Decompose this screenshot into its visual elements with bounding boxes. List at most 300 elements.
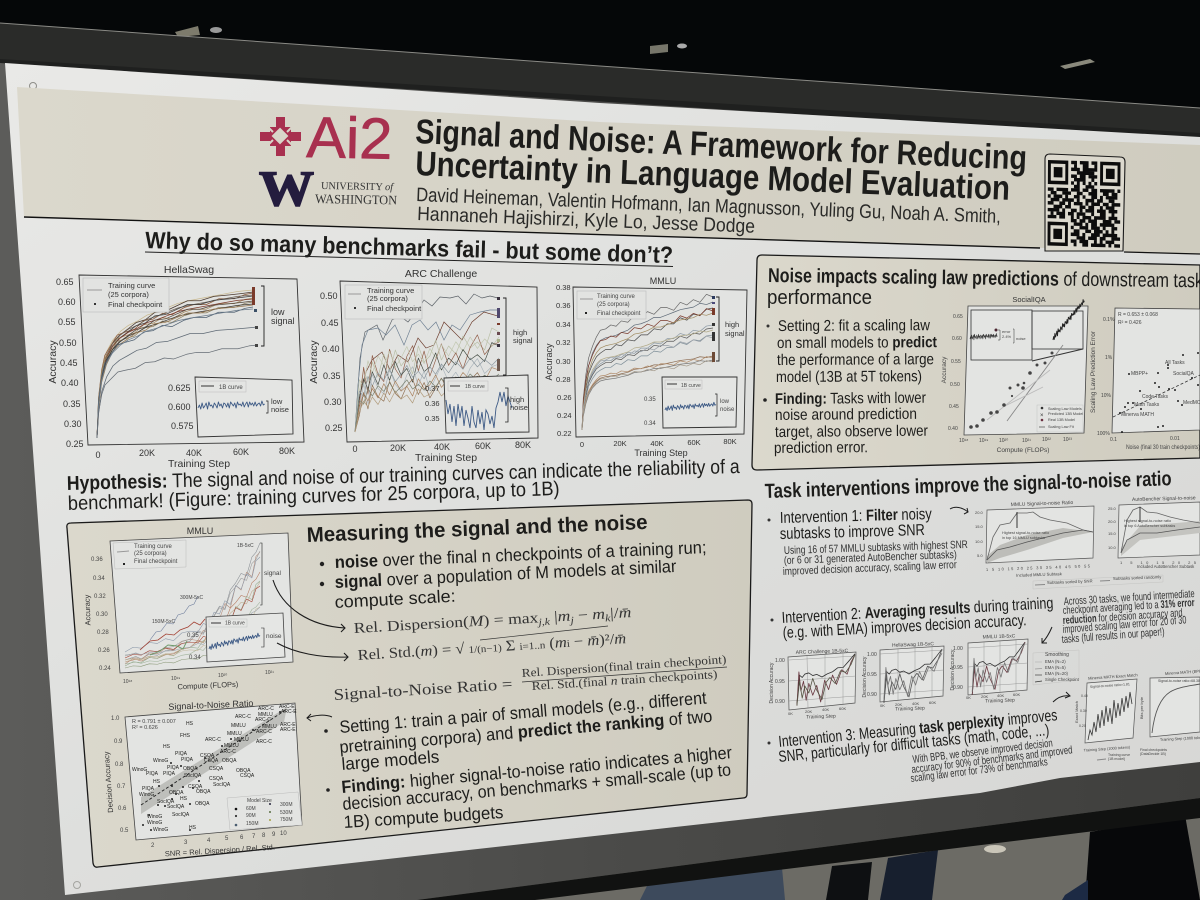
point labels: HS <box>189 825 197 831</box>
y axis labels: 0.24 <box>99 666 111 672</box>
legend: model size: Model Size <box>247 798 272 804</box>
legend: × <box>1040 413 1044 419</box>
chart: MMLU compute scaling: 300M-5xC <box>180 595 203 601</box>
x axis labels <box>580 437 737 449</box>
legend: smoothing <box>1033 650 1080 685</box>
bullet list: noise and signal definitions: noise over the final n checkpoints of a training run; <box>334 537 707 572</box>
point labels: PIQA <box>181 757 194 763</box>
x axis labels: 10¹⁸ <box>959 438 968 444</box>
inset: 1B curve: noise <box>510 403 528 412</box>
formula: relative dispersion: k <box>605 613 611 625</box>
x axis labels: 6 <box>240 835 244 841</box>
icon: Ai2 cross mark <box>260 117 301 156</box>
intervention 3 text: scaling law error for 73% of benchmarks <box>910 756 1049 785</box>
y axis labels: 10.0 <box>975 539 984 544</box>
y axis labels: 1.00 <box>775 658 785 664</box>
y axis labels: 0.40 <box>948 426 958 432</box>
chart: signal-to-noise vs decision accuracy <box>102 698 302 858</box>
y axis labels: 20.0 <box>1108 519 1117 524</box>
chart: noise vs scaling law prediction error: 0.01 <box>1170 436 1180 442</box>
y axis labels: 0.26 <box>557 393 572 402</box>
Ai2 wordmark: Ai2 <box>306 105 393 172</box>
chart: ARC Challenge training curves <box>308 268 538 464</box>
chart: noise vs scaling law prediction error: R² = 0.426 <box>1118 320 1142 326</box>
y axis labels: 0.5 <box>120 828 129 834</box>
hypothesis text <box>67 456 741 515</box>
x axis title: Training Step <box>415 452 477 464</box>
chart title: HellaSwag 1B-5xC <box>892 641 934 649</box>
point labels: SocIQA <box>213 782 231 788</box>
x axis labels: 10²² <box>1042 437 1051 443</box>
point labels: SocIQA <box>157 799 175 805</box>
curve bundle <box>355 294 499 432</box>
bullet list: setting 1 and finding: large models <box>341 746 440 774</box>
y axis labels: 0.9 <box>114 739 123 745</box>
y axis labels: 0.95 <box>867 672 877 678</box>
x axis labels: 10¹⁹ <box>979 438 988 444</box>
intervention 2 text: Intervention 2: Averaging results during training <box>781 595 1054 627</box>
line: sorted randomly <box>987 530 1093 560</box>
bullet list: noise and signal definitions <box>320 537 707 612</box>
legend: Training curve <box>108 281 155 290</box>
point labels: CSQA <box>204 758 219 764</box>
x axis labels: 60K <box>929 700 936 705</box>
y axis labels: 0.50 <box>950 382 960 388</box>
y axis labels: 0.45 <box>60 358 78 368</box>
chart: MMLU compute scaling: signal <box>264 570 282 577</box>
chart: Minerva MATH exact match: 0.30 <box>1080 709 1087 713</box>
point labels: MMLU <box>231 723 246 729</box>
x axis labels: 0 <box>95 450 101 460</box>
x axis labels <box>788 706 846 716</box>
inset: 1B curve: noise <box>266 633 282 640</box>
legend: Predicted 13B Model <box>1048 412 1083 416</box>
inset: 1B curve: 0.625 <box>168 383 191 393</box>
legend: Training curve <box>367 286 414 295</box>
task labels: Math Tasks <box>1134 402 1160 408</box>
legend: Final checkpoint <box>134 559 178 565</box>
inset: 1B curve: 0.35 <box>425 414 440 423</box>
formula: relative dispersion: |m <box>553 609 569 625</box>
y axis title: Decision Accuracy <box>102 751 115 813</box>
point labels: ARC-C <box>256 729 272 735</box>
point labels: ARC-C <box>205 737 221 743</box>
y axis labels: 0.50 <box>59 338 77 348</box>
signal bracket <box>261 286 264 346</box>
chart: MMLU signal-to-noise ratio by subtasks <box>975 500 1094 578</box>
regression line <box>1113 375 1200 417</box>
regression line <box>141 709 287 805</box>
y axis labels: 0.35 <box>323 371 341 381</box>
y axis labels: 5.0 <box>977 553 983 558</box>
legend: Final checkpoints <box>1140 748 1167 752</box>
chart: SocialIQA scaling law: 2.4% <box>1002 334 1012 339</box>
y axis labels: 1.00 <box>867 652 877 658</box>
chart: ARC Challenge decision accuracy <box>769 648 856 721</box>
y axis labels: 0.95 <box>775 679 785 685</box>
intervention 1 text: improved decision accuracy, scaling law error <box>783 559 957 578</box>
point labels: OBQA <box>169 790 184 796</box>
point labels: CSQA <box>200 753 215 759</box>
chart: ARC Challenge training curves: signal <box>513 336 533 345</box>
x axis labels: 5 <box>225 836 229 842</box>
scatter points <box>142 711 281 831</box>
y axis title: Exact Match <box>1074 701 1079 723</box>
x axis labels: 8 <box>262 833 266 839</box>
highlight arrow <box>1139 507 1141 522</box>
x axis title: Compute (FLOPs) <box>177 680 239 691</box>
bullet list: setting 2 and finding: the performance of a large <box>777 351 934 369</box>
x axis labels: 0.1 <box>1110 437 1117 443</box>
y axis labels: 0.6 <box>118 806 127 812</box>
University of Washington logo <box>259 160 398 216</box>
inset: 1B curve: noise <box>720 407 735 413</box>
confidence band <box>141 707 287 814</box>
y axis labels <box>556 283 572 438</box>
x axis labels: 0 <box>352 444 358 454</box>
point labels: R² = 0.626 <box>132 725 158 731</box>
y axis labels: 0.28 <box>97 630 109 636</box>
inset: 1B curve: 0.35 <box>644 397 656 403</box>
hypothesis text: benchmark! (Figure: training curves for 25 corpora, up to 1B) <box>67 478 560 515</box>
intervention 1 text: Using 16 of 57 MMLU subtasks with highest SNR <box>784 539 968 557</box>
task labels: Minerva MATH <box>1121 412 1154 418</box>
signal bracket <box>716 297 719 361</box>
legend: (25 corpora) <box>597 302 630 308</box>
y axis labels <box>953 646 963 691</box>
legend: (DataDecide 1B) <box>1140 752 1166 756</box>
point labels: MMLU <box>234 737 249 743</box>
inset: 1B curve: 0.34 <box>644 421 656 427</box>
bullet list: setting 2 and finding: Setting 2: fit a scaling law <box>778 317 931 335</box>
legend: Training curve <box>597 294 635 300</box>
zoomed inset frames <box>971 310 1083 361</box>
point labels: FHS <box>180 733 191 739</box>
arrow: intervention 1 to chart <box>950 507 968 514</box>
inset: 1B curve <box>425 375 529 433</box>
y axis labels: 0.40 <box>61 378 79 388</box>
y axis labels <box>320 291 343 433</box>
legend <box>345 285 422 319</box>
fit statistics: R = 0.653 ± 0.068 <box>1118 312 1158 318</box>
y axis labels: 0.32 <box>556 338 571 347</box>
x axis labels: 20K <box>895 702 902 707</box>
y axis labels: 1% <box>1105 355 1113 361</box>
panel heading: Measuring the signal and the noise <box>306 511 648 547</box>
x axis labels: 40K <box>822 707 829 712</box>
point labels: SocIQA <box>172 812 190 818</box>
point labels: ARC-C <box>258 706 274 712</box>
chart title: HellaSwag <box>164 264 214 276</box>
x axis labels: 40K <box>186 448 202 458</box>
inset: 1B curve <box>168 377 293 437</box>
point labels: CSQA <box>209 766 224 772</box>
x axis labels: 10 <box>280 831 287 837</box>
chart: MMLU compute scaling: 150M-5xC <box>152 619 175 625</box>
chart: MMLU compute scaling <box>82 526 293 691</box>
legend <box>83 278 169 312</box>
y axis labels: 0.55 <box>951 359 961 365</box>
smoothing curves <box>797 654 855 706</box>
y axis labels <box>948 314 963 432</box>
chart: SocialIQA scaling law: error <box>1002 329 1011 334</box>
bullet list: noise and signal definitions: compute scale: <box>334 586 456 612</box>
point labels: ARC-E <box>280 722 296 728</box>
inset: 1B curve: low <box>271 397 283 406</box>
arrow: noise to std <box>277 643 348 661</box>
y axis labels: 15.0 <box>975 524 984 529</box>
legend: (25 corpora) <box>367 294 408 303</box>
y axis labels: 0.30 <box>96 612 108 618</box>
bullet list: setting 1 and finding: Finding: higher signal-to-noise ratio indicates a higher <box>341 742 733 797</box>
y axis labels <box>1108 506 1117 550</box>
legend <box>577 291 646 319</box>
x axis labels: 0K <box>788 711 793 716</box>
point labels: ARC-C <box>256 739 272 745</box>
chart: AutoBencher signal-to-noise ratio: in top 6 AutoBencher subtasks <box>1124 524 1175 528</box>
chart title: MMLU <box>650 276 676 286</box>
point labels: PIQA <box>142 786 155 792</box>
chart: MMLU training curves: signal <box>725 329 745 338</box>
legend <box>1097 748 1167 761</box>
curve bundle <box>97 290 257 438</box>
formula: signal-to-noise ratio <box>333 652 727 704</box>
legend: model size: 150M <box>246 821 259 827</box>
legend: Training curve <box>134 544 172 550</box>
inset: 1B curve: low <box>720 399 730 405</box>
x axis labels <box>95 446 295 460</box>
y axis labels: 0.34 <box>556 320 571 329</box>
signal-to-noise note: Signal-to-noise ratio=1.81 <box>1090 682 1130 689</box>
y axis labels: 100% <box>1097 431 1110 437</box>
x axis labels: 1 5 10 15 20 25 30 35 40 45 50 55 <box>986 563 1091 572</box>
panel heading <box>767 265 1200 309</box>
y axis labels: 0.34 <box>93 576 105 582</box>
x axis labels: 2 <box>151 843 155 849</box>
smoothing curves <box>972 642 1025 695</box>
formula: relative std: Rel. Std.( m) = √ 1/(n−1) Σ i=1..n (mi − m̄)²/m̄ <box>357 631 627 664</box>
point labels: CSQA <box>209 776 224 782</box>
tape marks <box>30 82 80 888</box>
y axis labels: 0.36 <box>91 557 103 563</box>
task labels: Code Tasks <box>1142 394 1169 400</box>
x axis title: Training Step <box>168 458 230 470</box>
point labels: OBQA <box>195 801 210 807</box>
x axis labels: 40K <box>912 701 919 706</box>
bullet list: setting 1 and finding: Setting 1: train a pair of small models (e.g., different <box>339 688 707 737</box>
x axis labels: 80K <box>723 437 737 446</box>
task labels: All Tasks <box>1165 360 1185 366</box>
x axis labels: 60K <box>839 706 846 711</box>
y axis title: Accuracy <box>941 356 948 383</box>
point labels: WinoG <box>132 767 147 773</box>
highlight note: Highest signal-to-noise ratio <box>1124 519 1171 523</box>
y axis labels: 10% <box>1101 393 1112 399</box>
point labels: WinoG <box>139 792 154 798</box>
point labels: MMLU <box>258 712 273 718</box>
legend: subtask sort order: Subtasks sorted by SNR <box>1047 578 1093 585</box>
inset: 1B curve: 0.575 <box>171 421 194 431</box>
y axis labels: 10.0 <box>1108 545 1117 550</box>
hypothesis text: Hypothesis: The signal and noise of our training curves can indicate the reliability of a <box>67 456 741 495</box>
legend: model size <box>227 792 302 830</box>
intervention 1 text: Intervention 1: Filter noisy <box>780 506 932 527</box>
intervention 1 text <box>768 506 968 578</box>
chart title: Signal-to-Noise Ratio <box>168 698 254 712</box>
y axis title: Accuracy <box>308 340 320 384</box>
y axis title: Accuracy <box>82 594 93 626</box>
legend: smoothing: EMA (N=5) <box>1045 665 1066 670</box>
legend: model size: 750M <box>280 817 293 823</box>
y axis title: Decision Accuracy <box>950 649 956 690</box>
inset: 1B curve: high <box>510 395 524 404</box>
arrow: setting 1 to chart <box>307 714 332 721</box>
point labels: CSQA <box>188 784 203 790</box>
y axis labels: 0.40 <box>322 344 340 354</box>
low signal label: signal <box>271 316 295 326</box>
high signal label: high <box>725 320 739 329</box>
chart: SocialIQA scaling law: noise <box>1016 336 1026 341</box>
bullet list: noise and signal definitions: signal over a population of M models at similar <box>334 556 677 592</box>
title: Signal and Noise: A Framework for Reducing <box>415 113 1028 178</box>
x axis title: Training Step (1000 tokens) <box>1083 745 1131 753</box>
arrow: note to smoothing charts <box>1042 627 1052 643</box>
University of Washington logo: W <box>259 160 314 216</box>
line: sorted by SNR <box>1121 507 1200 553</box>
x axis labels: 10²¹ <box>1022 438 1031 444</box>
x axis labels: 10²³ <box>1063 437 1072 443</box>
point labels: SocIQA <box>167 804 185 810</box>
noisy curve <box>1088 692 1132 740</box>
x axis labels: 20K <box>139 448 155 458</box>
y axis labels: 0.65 <box>56 277 74 287</box>
legend: model size: 530M <box>280 810 293 816</box>
y axis labels: 0.30 <box>556 357 571 366</box>
x axis labels: 10²⁰ <box>218 673 227 679</box>
x axis labels <box>966 692 1020 700</box>
chart title: ARC Challenge <box>405 268 477 280</box>
point labels: ARC-C <box>235 714 251 720</box>
signal-to-noise note: Signal-to-noise ratio=68.38 <box>1158 679 1200 683</box>
scaling law fit lines <box>987 345 1063 421</box>
point labels: WinoG <box>153 827 168 833</box>
Ai2 logo <box>260 105 393 172</box>
legend: smoothing: EMA (N=20) <box>1045 671 1069 676</box>
x axis title: Compute (FLOPs) <box>997 447 1049 454</box>
y axis labels: 0.90 <box>867 692 877 698</box>
y axis title: Decision Accuracy <box>769 662 775 703</box>
bullet list: setting 2 and finding: target, also observe lower <box>775 423 928 441</box>
x axis labels: 60K <box>233 447 249 457</box>
formula: signal-to-noise ratio: Rel. Dispersion(final train checkpoint) <box>521 652 727 680</box>
y axis labels: 25.0 <box>1108 506 1117 511</box>
x axis labels: 10¹⁸ <box>123 679 132 685</box>
x axis labels: 4 <box>207 838 211 844</box>
y axis labels <box>867 652 877 698</box>
y axis labels: 0.45 <box>321 318 339 328</box>
bullet list: setting 1 and finding: 1B) compute budgets <box>343 802 504 832</box>
point labels: WinoG <box>147 820 162 826</box>
x axis labels: 60K <box>687 438 701 447</box>
legend <box>1037 405 1083 432</box>
header band <box>17 87 1200 254</box>
point labels: WinoG <box>153 758 168 764</box>
chart: Minerva MATH exact match: 0.20 <box>1079 724 1086 728</box>
formula: relative dispersion: |/m̄ <box>610 605 630 622</box>
y axis title: Scaling Law Prediction Error <box>1090 330 1097 413</box>
x axis title: Training Step <box>985 697 1015 705</box>
highlight arrow <box>1016 512 1018 528</box>
chart: HellaSwag training curves <box>47 264 304 470</box>
bullet list: setting 2 and finding <box>763 317 937 457</box>
point labels: ARC-C <box>255 717 271 723</box>
chart: Minerva MATH BPB <box>1139 668 1200 742</box>
y axis labels: 0.24 <box>557 411 572 420</box>
formula: signal-to-noise ratio: Rel. Std.(final n train checkpoints) <box>531 667 718 693</box>
y axis labels: 1.0 <box>111 716 120 722</box>
title <box>415 113 1028 208</box>
legend: (1B model) <box>1108 757 1125 761</box>
legend: Final checkpoint <box>597 311 641 317</box>
panel: noise impacts scaling law predictions <box>752 255 1200 470</box>
x axis title: Training Step <box>895 705 925 713</box>
inset: 1B curve: noise <box>271 405 289 414</box>
y axis labels: 15.0 <box>1108 531 1117 536</box>
y axis labels: 0.26 <box>98 648 110 654</box>
point labels: MMLU <box>227 731 242 737</box>
smoothing curves <box>884 649 942 703</box>
y axis labels: 0.60 <box>58 297 76 307</box>
legend: subtask sort order: Subtasks sorted randomly <box>1113 574 1162 581</box>
point labels: OBQA <box>196 789 211 795</box>
chart: MMLU training curves <box>544 276 747 458</box>
y axis labels: 0.22 <box>557 429 572 438</box>
intervention 3 text: SNR, particularly for difficult tasks (math, code, ...) <box>778 722 1050 766</box>
University of Washington logo: WASHINGTON <box>315 191 398 207</box>
y axis labels: 0.1% <box>1103 317 1115 323</box>
point labels: PIQA <box>175 751 188 757</box>
intervention 1 text: subtasks to improve SNR <box>780 522 925 543</box>
point labels: OBQA <box>236 768 251 774</box>
inset: 1B curve: 0.36 <box>425 399 440 408</box>
bullet list: setting 2 and finding: noise around prediction <box>775 406 917 424</box>
legend: smoothing: Smoothing <box>1045 652 1069 658</box>
x axis labels: 0K <box>880 703 885 708</box>
formula: relative dispersion: Rel. Dispersion( M) = max <box>353 611 531 637</box>
x axis labels: 0 <box>580 440 584 449</box>
bullet list: setting 2 and finding: prediction error. <box>774 439 868 457</box>
y axis labels <box>56 277 84 449</box>
panel: measuring the signal and the noise <box>67 500 752 867</box>
intervention 3 text: Intervention 3: Measuring task perplexity improves <box>778 707 1058 751</box>
y axis title: Bits per byte <box>1139 696 1144 719</box>
y axis labels: 0.30 <box>64 419 82 429</box>
legend: Scaling Law Fit <box>1048 425 1075 429</box>
x axis labels <box>151 831 287 849</box>
chart title: MMLU <box>187 526 213 536</box>
legend: (25 corpora) <box>134 551 167 557</box>
error band <box>987 528 1093 563</box>
y axis labels: 0.95 <box>953 665 963 671</box>
high signal label: high <box>513 328 527 337</box>
intervention 2 text: (e.g. with EMA) improves decision accuracy. <box>782 612 1027 642</box>
y axis labels: 0.65 <box>953 314 963 320</box>
chart: Minerva MATH exact match <box>1074 672 1167 761</box>
smooth rising curve <box>1152 684 1200 733</box>
point labels: ARC-E <box>279 704 295 710</box>
y axis labels: 0.36 <box>556 301 571 310</box>
signal bracket and label <box>260 543 262 605</box>
